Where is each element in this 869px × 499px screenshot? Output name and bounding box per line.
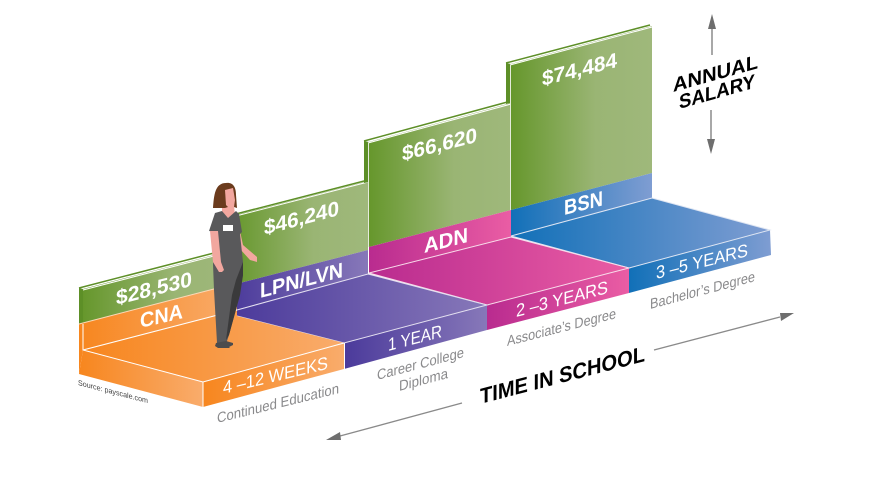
label: BSN: BSN <box>564 187 603 220</box>
label: 1 year: 1 YEAR <box>388 320 442 355</box>
caption: Career College Diploma: Career College <box>377 345 464 384</box>
heading: time in school: TIME IN SCHOOL <box>480 341 645 409</box>
bar: ADN salary <box>364 101 511 247</box>
arrow: down <box>707 110 715 154</box>
left arm <box>210 231 224 272</box>
bar: BSN salary <box>506 25 652 236</box>
axis: time in school <box>326 313 794 440</box>
face <box>225 188 235 208</box>
salary: BSN: $74,484 <box>542 48 617 91</box>
bar: CNA salary <box>79 247 237 324</box>
heading: annual salary: ANNUAL <box>673 52 758 97</box>
name badge <box>223 225 233 231</box>
caption: Career College Diploma <box>377 345 464 395</box>
bar: LPN/LVN salary <box>232 180 368 285</box>
caption: Career College Diploma: Diploma <box>399 366 449 395</box>
neck <box>222 205 235 218</box>
captions <box>78 269 755 427</box>
label: ADN: ADN <box>424 223 468 258</box>
label: 3–5 years: 3 –5 YEARS <box>656 239 748 283</box>
salary: LPN/LVN: $46,240 <box>264 196 339 240</box>
step: ADN pink <box>369 210 629 330</box>
step: LPN/LVN purple <box>232 250 487 369</box>
hair <box>213 183 237 208</box>
trouser shadow <box>226 262 243 340</box>
label: 2–3 years: 2 –3 YEARS <box>516 276 608 321</box>
source note: Source: payscale.com <box>78 378 148 405</box>
salary: ADN: $66,620 <box>402 123 477 166</box>
caption: Bachelor's Degree: Bachelor’s Degree <box>650 269 755 313</box>
step: CNA orange <box>79 283 344 407</box>
right arm <box>240 231 257 262</box>
arrow: left <box>326 403 462 440</box>
label: CNA: CNA <box>140 299 183 333</box>
caption: Associate's Degree: Associate’s Degree <box>507 306 616 350</box>
arrow: up <box>708 14 716 55</box>
shoes <box>215 341 233 348</box>
caption: Continued Education: Continued Education <box>217 381 339 427</box>
step: BSN blue <box>511 173 771 293</box>
figure: nurse <box>209 183 257 348</box>
axis: annual salary <box>673 14 758 154</box>
label: LPN/LVN: LPN/LVN <box>260 258 343 303</box>
arrow: right <box>654 313 794 350</box>
dress and trousers <box>209 211 243 344</box>
heading: annual salary: SALARY <box>679 71 755 114</box>
label: 4–12 weeks: 4 –12 WEEKS <box>223 352 328 398</box>
salary: CNA: $28,530 <box>116 267 192 310</box>
